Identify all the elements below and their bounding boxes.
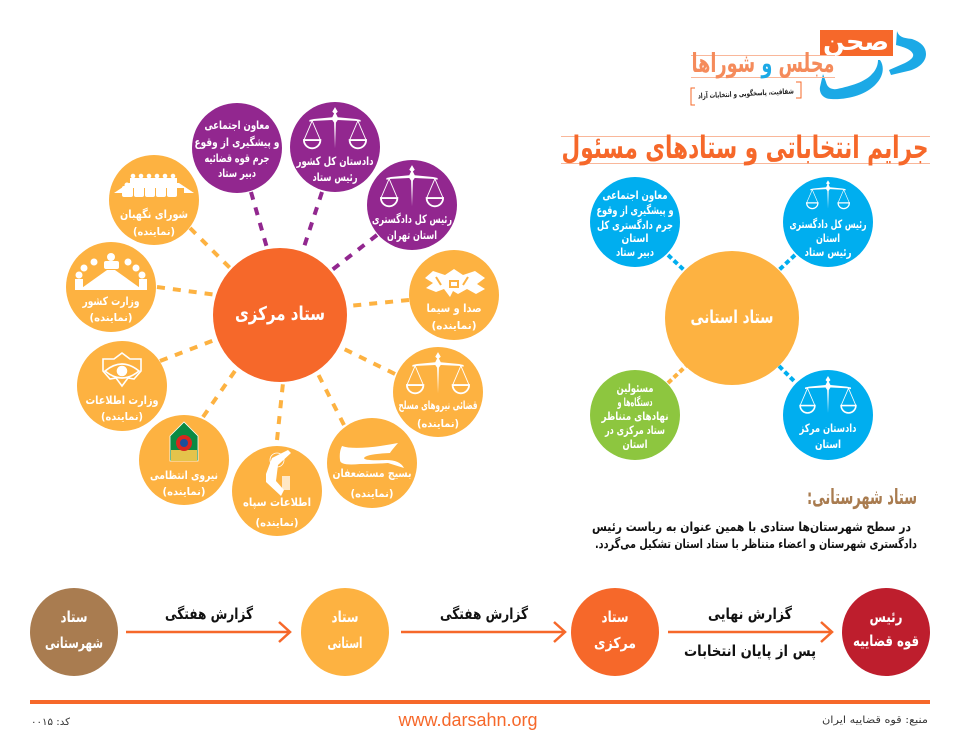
node: counterpart officials: استان xyxy=(622,437,648,451)
node: state broadcaster: صدا و سیما xyxy=(426,301,482,316)
arrow: centre to judiciary head xyxy=(668,622,832,642)
footer: url: www.darsahn.org xyxy=(397,710,538,730)
central circle: ستاد مرکزی xyxy=(235,303,325,325)
node: province chief justice: رئیس کل دادگستری xyxy=(790,217,866,231)
node: deputy province: جرم دادگستری کل xyxy=(597,218,673,232)
node: province prosecutor xyxy=(783,370,873,460)
flow node: province: استانی xyxy=(328,634,362,652)
flow node: county xyxy=(30,588,118,676)
node: basij: بسیج مستضعفان xyxy=(332,466,412,480)
node: deputy province: معاون اجتماعی xyxy=(602,188,668,203)
node: basij: (نماینده) xyxy=(350,488,394,500)
node: counterpart officials: مسئولین xyxy=(616,381,654,396)
node: province prosecutor: استان xyxy=(815,437,841,451)
icon: eye emblem xyxy=(103,353,141,386)
node: interior ministry: (نماینده) xyxy=(90,312,132,324)
panel: provincial headquarters diagram xyxy=(590,177,873,460)
logo: bracketed tagline: شفافیت، پاسخگویی و انتخابات آزاد xyxy=(698,85,794,101)
flow node: centre xyxy=(571,588,659,676)
flow label: after elections: پس از پایان انتخابات xyxy=(684,642,816,661)
node: police: (نماینده) xyxy=(162,486,206,498)
flow label: final report: گزارش نهایی xyxy=(708,605,792,623)
node: deputy social: جرم قوه قضائیه xyxy=(204,151,270,166)
footer: source: منبع: قوه قضاییه ایران xyxy=(822,715,928,726)
node: prosecutor general xyxy=(290,102,380,192)
node: deputy province: و پیشگیری از وقوع xyxy=(596,203,674,218)
node: basij xyxy=(327,418,417,508)
node: Tehran chief justice: استان تهران xyxy=(387,228,437,242)
text block: county headquarters xyxy=(592,485,917,551)
footer xyxy=(30,700,930,730)
node: police xyxy=(139,415,229,505)
node: counterpart officials xyxy=(590,370,680,460)
flow node: province: ستاد xyxy=(332,608,358,626)
flow node: judiciary head: رئیس xyxy=(870,608,902,626)
node: deputy province xyxy=(590,177,680,267)
node: Tehran chief justice xyxy=(367,160,457,250)
node: prosecutor general: رئیس ستاد xyxy=(312,170,358,184)
icon: broadcaster logo xyxy=(425,269,485,297)
flow node: county: شهرستانی xyxy=(45,634,103,652)
icon: police badge xyxy=(170,422,198,461)
node: IRGC intelligence: اطلاعات سپاه xyxy=(243,495,311,509)
logo: subtitle line: مجلس و شوراها xyxy=(692,49,834,79)
flow node: province xyxy=(301,588,389,676)
logo: blue calligraphy xyxy=(820,31,926,99)
node: military judiciary: (نماینده) xyxy=(417,418,459,430)
node: Tehran chief justice: رئیس کل دادگستری xyxy=(372,212,452,226)
flow node: county: ستاد xyxy=(60,608,88,626)
logo: bracketed tagline xyxy=(691,82,801,105)
node: deputy social: و پیشگیری از وقوع xyxy=(194,135,280,150)
node: military judiciary: قضائی نیروهای مسلح xyxy=(398,398,478,413)
node: IRGC intelligence: (نماینده) xyxy=(256,517,298,529)
node: deputy social: دبیر ستاد xyxy=(218,166,256,180)
flow: reporting chain xyxy=(30,588,930,676)
flow node: judiciary head: قوه قضاییه xyxy=(853,632,919,650)
node: counterpart officials: ستاد مرکزی در xyxy=(604,423,665,437)
node: state broadcaster: (نماینده) xyxy=(432,320,476,332)
node: prosecutor general: دادستان کل کشور xyxy=(296,154,374,169)
node: guardian council: شورای نگهبان xyxy=(120,207,188,222)
icon: council xyxy=(114,174,194,197)
paragraph: county headquarters: در سطح شهرستان‌ها ستادی با همین عنوان به ریاست رئیس xyxy=(592,519,911,534)
node: deputy social xyxy=(192,103,282,193)
central circle: provincial: ستاد استانی xyxy=(690,307,774,328)
node: province chief justice: استان xyxy=(816,231,840,245)
node: state broadcaster xyxy=(409,250,499,340)
flow label: weekly report 2: گزارش هفتگی xyxy=(440,605,528,623)
arrow: county to province xyxy=(126,622,290,642)
flow label: weekly report 1: گزارش هفتگی xyxy=(165,605,253,623)
node: interior ministry xyxy=(66,242,156,332)
node: guardian council: (نماینده) xyxy=(133,226,175,238)
connectors: orange xyxy=(157,228,409,440)
node: deputy province: استان xyxy=(622,231,648,245)
node: interior ministry: وزارت کشور xyxy=(82,294,140,309)
node: IRGC intelligence xyxy=(232,446,322,536)
paragraph: county headquarters xyxy=(592,519,917,551)
icon: IRGC emblem xyxy=(266,450,291,496)
node: deputy province: دبیر ستاد xyxy=(616,245,654,259)
node: counterpart officials: نهادهای متناظر xyxy=(601,409,668,423)
node: counterpart officials: دستگاه‌ها و xyxy=(617,395,653,410)
icon: ribbon xyxy=(340,443,404,468)
arrow: province to centre xyxy=(401,622,565,642)
footer: code: کد: ۰۰۱۵ xyxy=(31,717,70,728)
central circle: provincial xyxy=(665,251,799,385)
node: intelligence ministry: (نماینده) xyxy=(101,411,143,423)
logo xyxy=(691,27,926,105)
flow node: centre: مرکزی xyxy=(594,634,636,652)
node: intelligence ministry xyxy=(77,341,167,431)
node: province chief justice xyxy=(783,177,873,267)
node: police: نیروی انتظامی xyxy=(150,468,218,483)
node: province prosecutor: دادستان مرکز xyxy=(799,421,857,435)
node: guardian council xyxy=(109,155,199,245)
node: military judiciary xyxy=(393,347,483,437)
flow node: judiciary head xyxy=(842,588,930,676)
connectors: purple xyxy=(251,192,377,270)
icon: meeting table xyxy=(75,253,147,290)
node: deputy social: معاون اجتماعی xyxy=(204,118,270,133)
node: intelligence ministry: وزارت اطلاعات xyxy=(86,393,158,408)
flow node: centre: ستاد xyxy=(602,608,628,626)
logo: orange block: صحن xyxy=(823,27,889,57)
node: province chief justice: رئیس ستاد xyxy=(804,245,852,259)
central circle xyxy=(213,248,347,382)
panel: central headquarters diagram xyxy=(66,102,499,536)
connectors: provincial xyxy=(668,255,795,383)
